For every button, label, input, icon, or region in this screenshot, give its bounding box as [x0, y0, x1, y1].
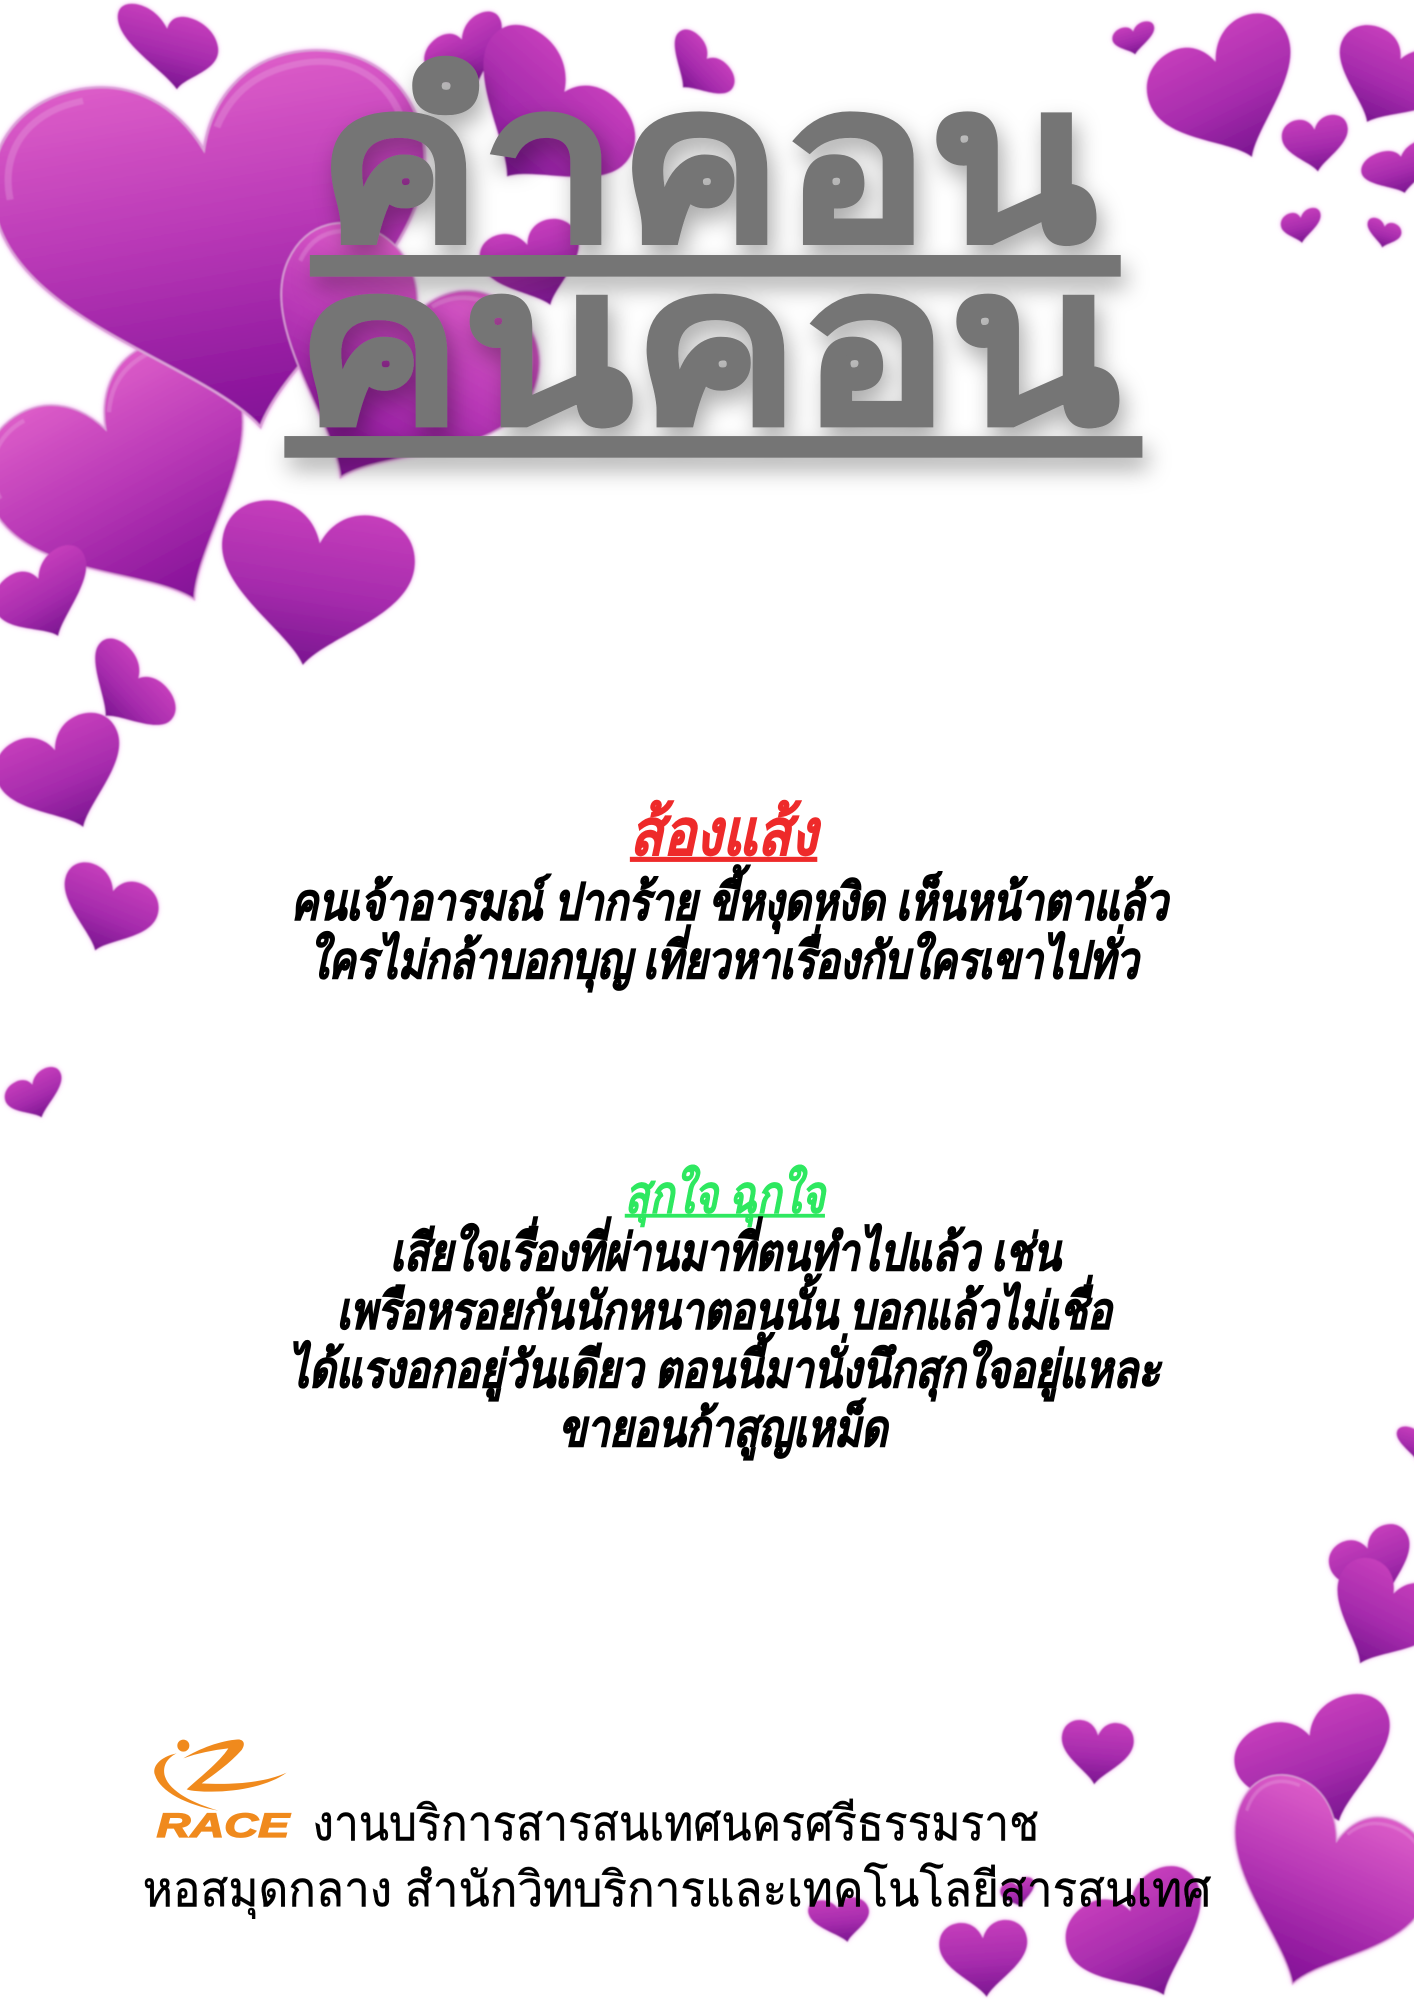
footer text: งานบริการสารสนเทศนครศรีธรรมราช	[312, 1797, 1039, 1851]
definition text 2: ได้แรงอกอยู่วันเดียว ตอนนี้มานั่งนึกสุกใจอยู่แหละ	[288, 1332, 1162, 1402]
footer text: หอสมุดกลาง สำนักวิทบริการและเทคโนโลยีสารสนเทศ	[143, 1862, 1212, 1919]
title line 2: คนคอน	[296, 224, 1119, 469]
heading: green term: สุกใจ ฉุกใจ	[625, 1165, 828, 1228]
title	[284, 42, 1142, 469]
hearts: bottom right cluster	[805, 1424, 1414, 2000]
hearts: top right cluster	[1112, 1, 1414, 253]
definition text 2: ขายอนก้าสูญเหม็ด	[558, 1398, 890, 1461]
logo: RACE	[154, 1739, 291, 1845]
logo: RACE: RACE	[157, 1807, 291, 1845]
definition text 2: เพรือหรอยกันนักหนาตอนนั้น บอกแล้วไม่เชื่อ	[337, 1274, 1114, 1340]
definition text 2	[288, 1216, 1162, 1461]
heading: red term: ส้องแส้ง	[630, 796, 821, 868]
definition text 1: คนเจ้าอารมณ์ ปากร้าย ขี้หงุดหงิด เห็นหน้าตาแล้ว	[291, 864, 1171, 934]
footer text	[143, 1797, 1212, 1919]
definition text 2: เสียใจเรื่องที่ผ่านมาที่ตนทำไปแล้ว เช่น	[390, 1216, 1063, 1281]
definition text 1	[291, 864, 1171, 993]
hearts: top left cluster	[0, 0, 741, 1131]
title line 1: คำคอน	[317, 42, 1097, 287]
definition text 1: ใครไม่กล้าบอกบุญ เที่ยวหาเรื่องกับใครเขาไปทั่ว	[309, 924, 1141, 993]
